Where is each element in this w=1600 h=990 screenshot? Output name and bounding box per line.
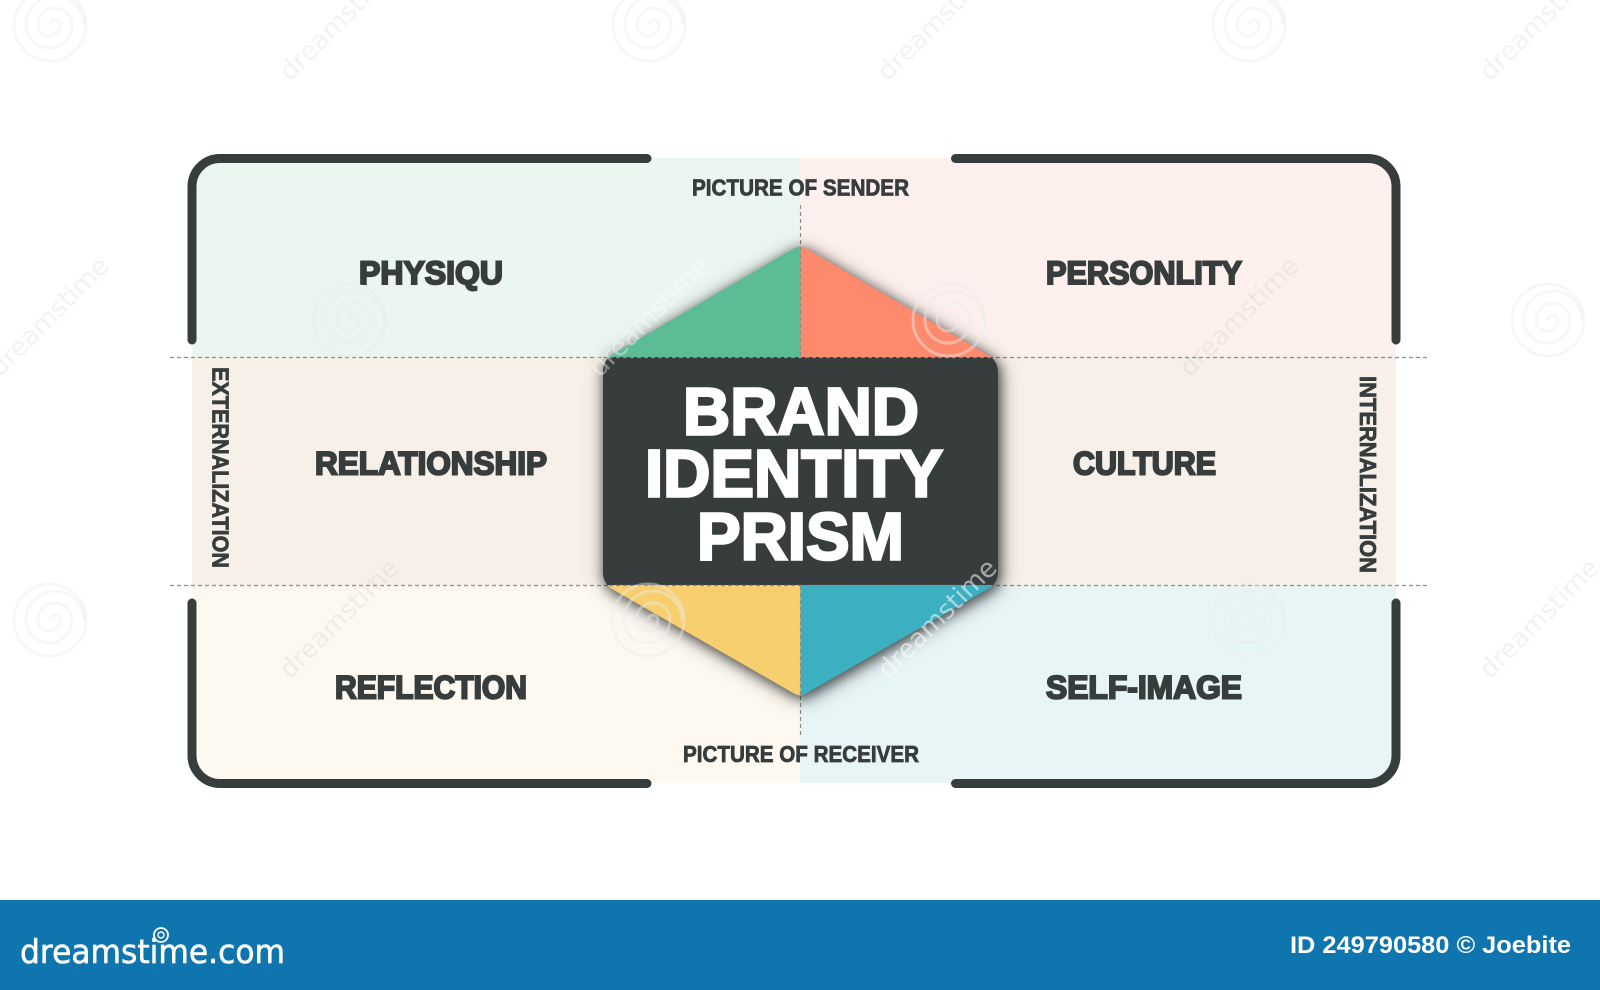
title: brand identity prism: BRAND: [683, 374, 919, 450]
panel: physique background: [192, 158, 800, 357]
label: relationship: RELATIONSHIP: [315, 446, 547, 482]
label: internalization: INTERNALIZATION: [1355, 376, 1381, 573]
frame: bottom-right bracket: [956, 603, 1396, 784]
title: brand identity prism: [645, 374, 943, 574]
watermarks: dreamstime: [872, 553, 1003, 685]
panel: self-image background: [800, 585, 1396, 783]
label: externalization: EXTERNALIZATION: [208, 367, 234, 568]
label: personlity: PERSONLITY: [1046, 255, 1242, 291]
label: self-image: SELF-IMAGE: [1046, 670, 1242, 706]
label: picture of receiver: PICTURE OF RECEIVER: [683, 741, 919, 767]
watermarks: dreamstime: [274, 553, 405, 685]
panel: personality background: [800, 158, 1396, 357]
title: brand identity prism: PRISM: [697, 500, 904, 574]
label: picture of sender: PICTURE OF SENDER: [692, 174, 909, 200]
watermarks: [0, 0, 1600, 685]
frame: bottom-left bracket: [192, 603, 647, 784]
frame: top-right bracket: [956, 158, 1396, 340]
label: culture: CULTURE: [1073, 446, 1216, 482]
watermarks: dreamstime: [1174, 251, 1305, 383]
footer logo: dreamstime.com: dreamstime.com: [20, 932, 285, 971]
footer credit: ID 249790580 © Joebite: [1290, 932, 1571, 959]
panel: reflection background: [192, 585, 800, 783]
label: physiqu: PHYSIQU: [359, 255, 503, 291]
title: brand identity prism: IDENTITY: [645, 436, 943, 512]
watermarks: dreamstime: [584, 251, 715, 383]
hexagon prism: [595, 240, 1007, 703]
footer bar: [0, 900, 1600, 990]
panel: middle band background: [192, 357, 1396, 585]
label: reflection: REFLECTION: [335, 670, 527, 706]
frame: top-left bracket: [192, 158, 647, 340]
